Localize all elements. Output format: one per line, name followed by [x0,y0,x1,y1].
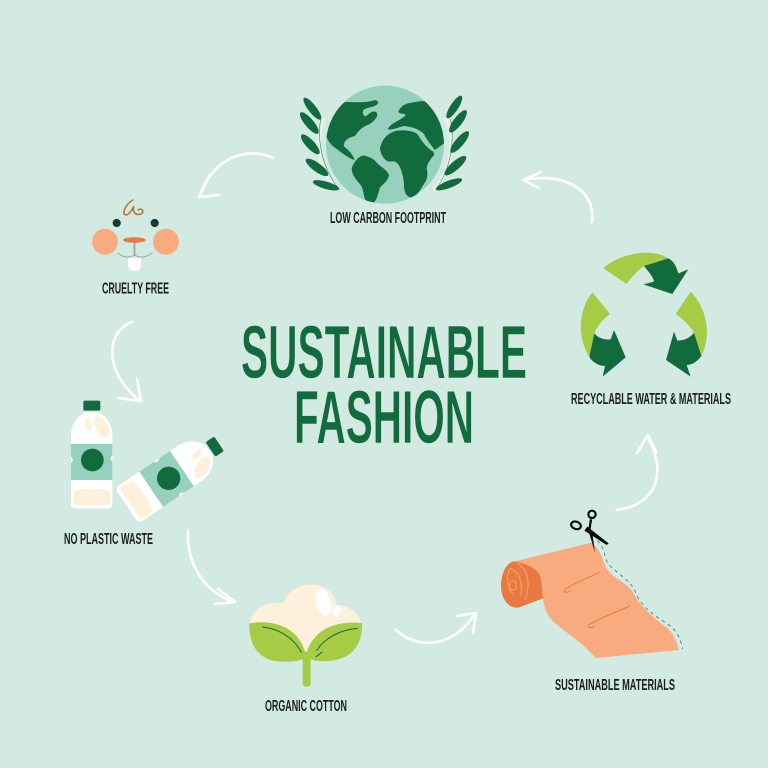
title [241,310,527,459]
label: organic cotton: ORGANIC COTTON [265,698,347,715]
arrow: fabric to recycle [617,435,657,510]
bottle upright [71,401,112,509]
icon: bunny face [92,200,179,271]
title: SUSTAINABLE [241,310,527,394]
icon: fabric roll and scissors [501,511,683,658]
arrow: recycle to globe [523,172,592,222]
arrow: globe to bunny [199,153,273,197]
arrow: bottles to cotton [188,530,235,604]
bottle tilted [115,426,231,523]
icon: organic cotton [249,584,362,687]
title: FASHION [294,375,474,459]
icon: plastic bottles [71,401,231,523]
label: no plastic waste: NO PLASTIC WASTE [64,531,153,548]
icon: globe with laurel [297,86,472,204]
label: low carbon footprint: LOW CARBON FOOTPRINT [330,210,446,227]
label: sustainable materials: SUSTAINABLE MATERIALS [555,677,675,694]
arrow: bunny to bottles [112,322,141,401]
icon: recycling symbol [581,253,707,377]
arrow: cotton to fabric [396,613,476,643]
scissors [570,511,609,553]
label: cruelty free: CRUELTY FREE [102,280,169,298]
